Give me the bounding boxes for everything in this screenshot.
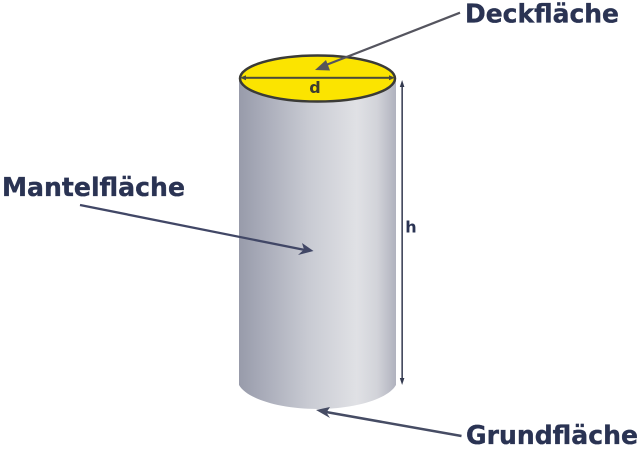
height arrow (400, 80, 404, 385)
height label: h (405, 218, 417, 236)
label: base: Grundfläche (466, 421, 638, 451)
label: lateral surface: Mantelfläche (2, 173, 185, 203)
arrow: top face (315, 13, 460, 70)
arrow: base (316, 407, 462, 436)
cylinder body (239, 78, 396, 409)
diameter line (240, 75, 395, 80)
top face (240, 56, 395, 102)
label: top face: Deckfläche (465, 0, 619, 30)
arrow: lateral surface (80, 205, 314, 255)
diameter label: d (309, 78, 321, 97)
